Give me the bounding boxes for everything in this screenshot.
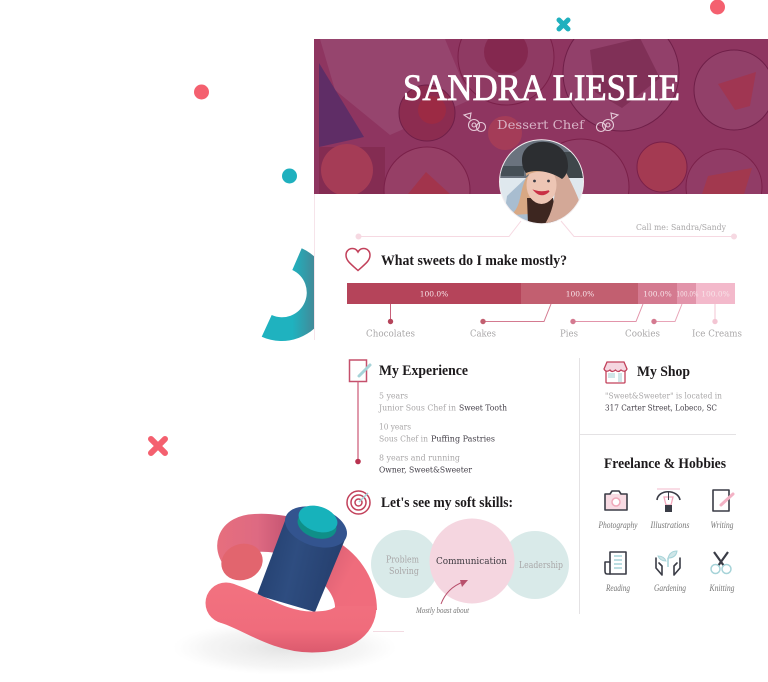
ring lower arm: [226, 603, 356, 632]
stacked bar chart: 100.0%: [566, 290, 594, 298]
icon: experience timeline: [350, 360, 370, 464]
icon: reading: [605, 552, 626, 574]
chart labels: Chocolates: [366, 330, 415, 340]
icon: heart: [346, 248, 370, 270]
shadow: [173, 621, 397, 675]
experience text: Junior Sous Chef in: [378, 404, 456, 414]
heading: shop: My Shop: [637, 364, 690, 380]
experience text: Owner, Sweet&Sweeter: [379, 466, 473, 476]
chart labels: [366, 330, 742, 340]
decoration: pink dot left: [194, 84, 209, 100]
panel edge: [314, 194, 316, 340]
stacked bar chart: 100.0%: [420, 290, 448, 298]
cylinder top: [280, 499, 352, 555]
soft skills venn: Communication: [436, 556, 507, 567]
heading: hobbies: Freelance & Hobbies: [604, 456, 726, 472]
icon: target: [347, 491, 370, 514]
stacked bar chart: 100.0%: [676, 290, 698, 298]
decoration: teal dot: [282, 168, 297, 184]
label: knitting: Knitting: [709, 583, 735, 593]
heading: experience: My Experience: [379, 363, 468, 379]
chart labels: Cakes: [470, 330, 496, 340]
icon: illustrations: [657, 489, 680, 512]
label: photography: Photography: [598, 520, 638, 530]
label: gardening: Gardening: [654, 583, 686, 593]
stacked bar chart: [347, 283, 735, 304]
annotation: Mostly boast about: [415, 606, 470, 615]
decoration: pink dot top right: [710, 0, 725, 14]
icon: shop: [604, 362, 627, 383]
experience text: 8 years and running: [379, 454, 461, 464]
shop text: 317 Carter Street, Lobeco, SC: [605, 404, 717, 414]
icon: right dessert: [596, 113, 618, 132]
icon: gardening: [656, 551, 680, 575]
icon: camera: [605, 491, 627, 510]
soft skills venn: Solving: [389, 567, 419, 577]
cylinder teal cap: [294, 501, 341, 544]
experience text: Puffing Pastries: [431, 434, 495, 444]
soft skills venn: Leadership: [519, 561, 563, 571]
ring right arm behind cylinder: [318, 540, 377, 610]
label: writing: Writing: [710, 520, 734, 530]
icon: knitting: [711, 552, 731, 574]
cylinder body: [257, 518, 346, 612]
soft skills venn: [371, 518, 569, 604]
portrait photo: [499, 139, 584, 224]
label: reading: Reading: [605, 583, 630, 593]
nickname: Call me: Sandra/Sandy: [636, 223, 726, 233]
decoration: pink cross: [151, 439, 165, 453]
ring left tip: [206, 582, 246, 624]
stacked bar chart: 100.0%: [643, 290, 672, 298]
chart connectors: [388, 304, 718, 324]
banner title: SANDRA LIESLIE: [403, 68, 680, 109]
shop text: [605, 392, 722, 414]
experience text: Sweet Tooth: [459, 404, 507, 414]
chart labels: Cookies: [625, 330, 660, 340]
dividers: [580, 358, 736, 614]
decoration: teal arc: [262, 248, 314, 341]
experience text: 10 years: [379, 422, 411, 432]
ring end cap: [216, 538, 268, 586]
chart labels: Ice Creams: [692, 330, 742, 340]
experience text: Sous Chef in: [379, 434, 428, 444]
heading: sweets: What sweets do I make mostly?: [381, 253, 567, 269]
arrow: [441, 580, 468, 604]
experience text: 5 years: [379, 392, 408, 402]
decoration: teal cross: [559, 20, 568, 29]
label: illustrations: Illustrations: [650, 520, 690, 530]
icon: left dessert: [464, 113, 486, 132]
ring upper arm: [236, 533, 298, 560]
chart labels: Pies: [560, 330, 578, 340]
icon: writing: [713, 490, 733, 511]
heading: soft skills: Let's see my soft skills:: [381, 495, 513, 511]
soft skills venn: Problem: [386, 556, 419, 566]
shop text: "Sweet&Sweeter" is located in: [605, 392, 722, 402]
experience text: [378, 392, 507, 476]
banner subtitle: Dessert Chef: [497, 117, 585, 132]
3D shape: [173, 499, 397, 675]
connector lines: [356, 221, 736, 239]
stacked bar chart: 100.0%: [701, 290, 730, 298]
banner: [314, 39, 768, 194]
